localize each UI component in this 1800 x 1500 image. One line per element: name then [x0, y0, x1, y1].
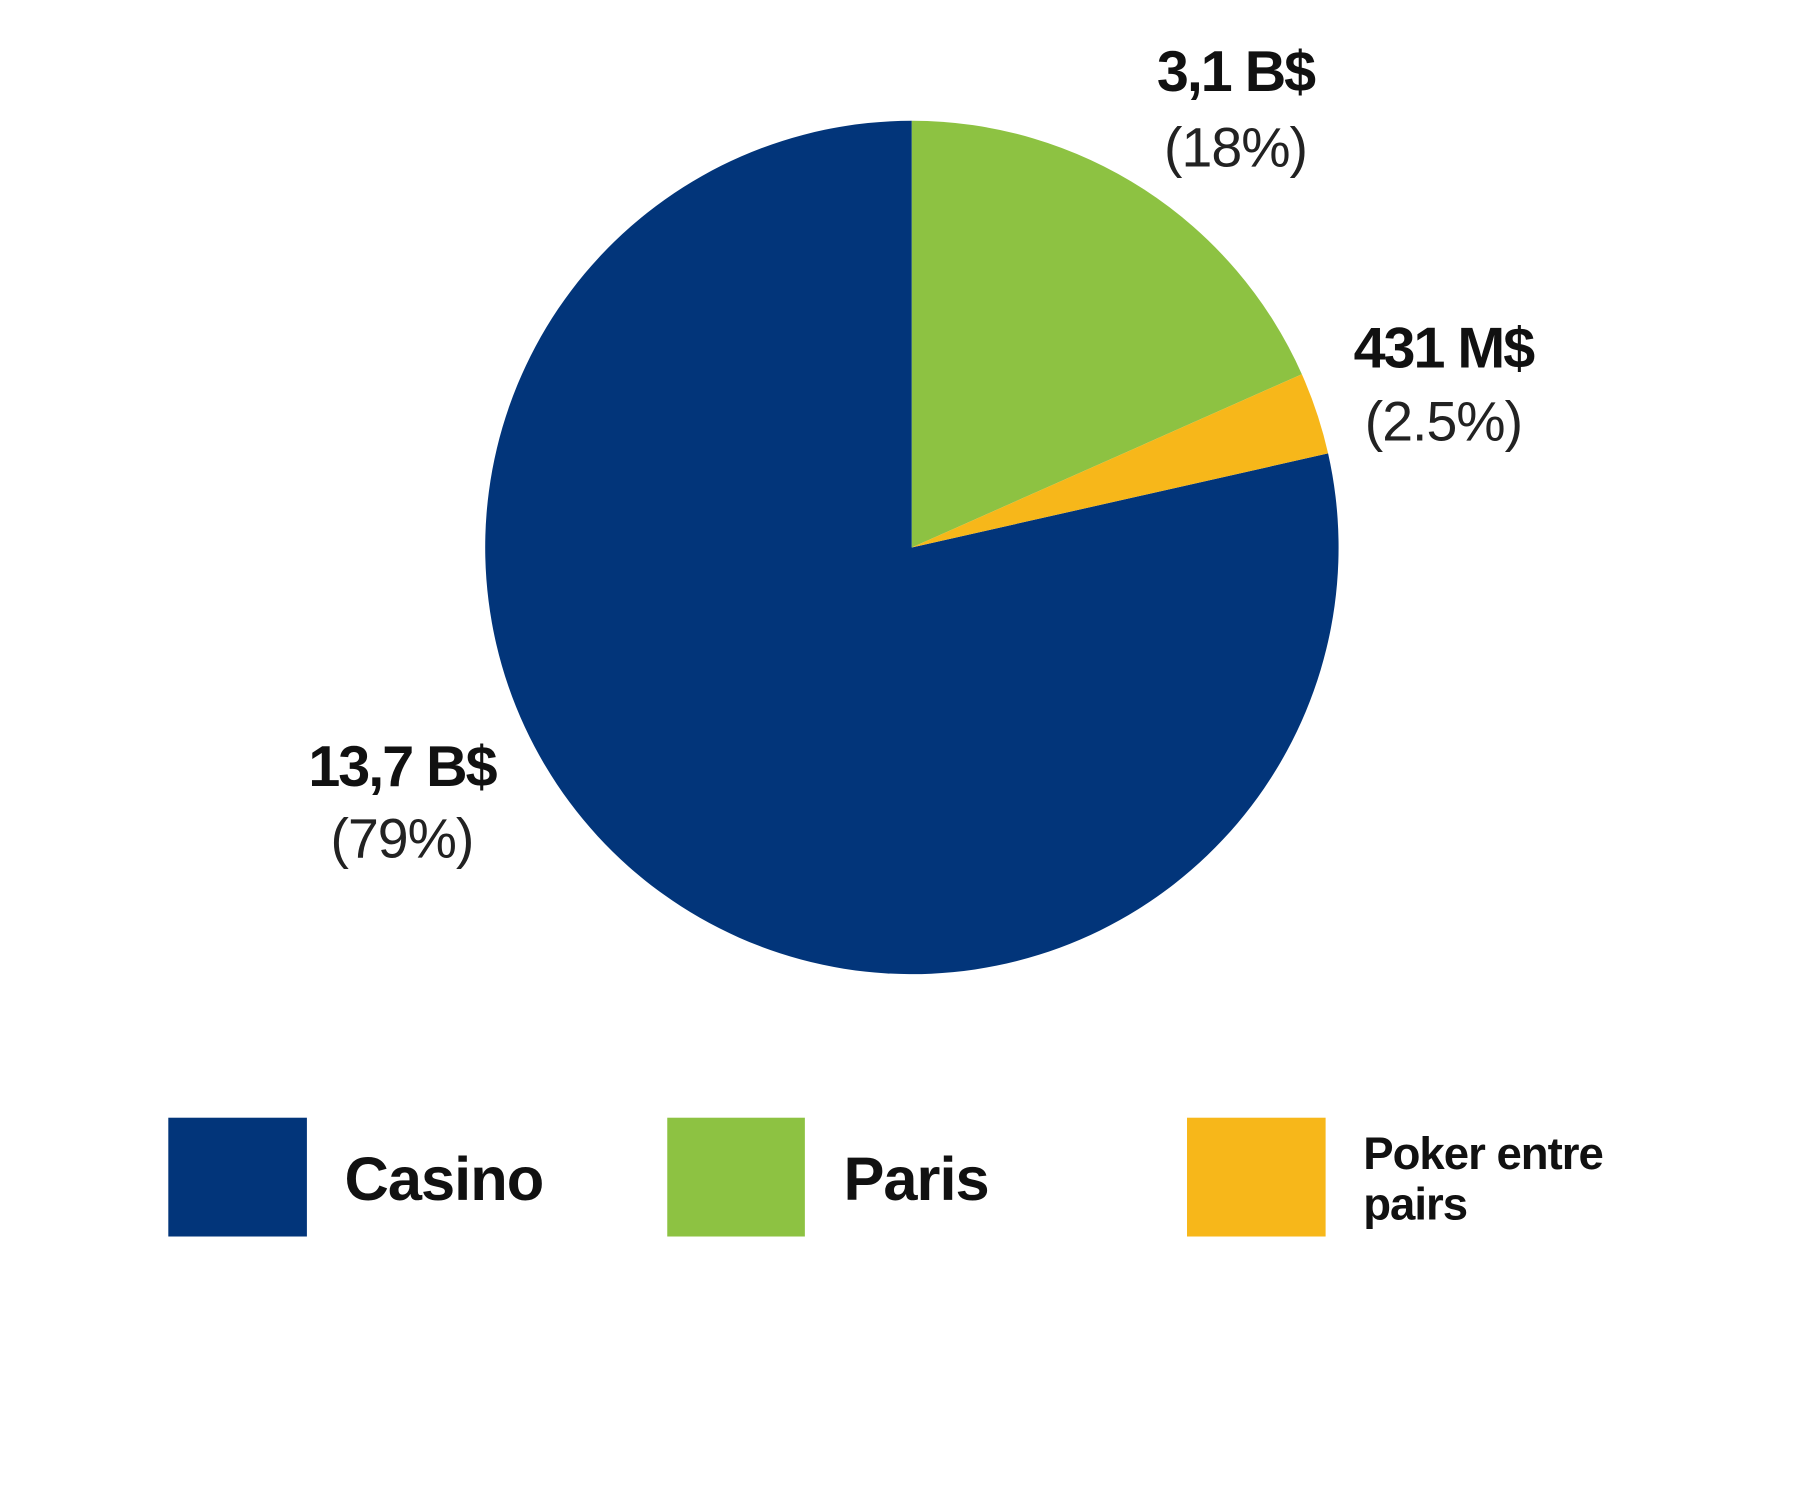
legend: paris: Paris: [843, 1145, 989, 1214]
legend: [168, 1118, 1603, 1237]
label: casino value: (79%): [330, 807, 473, 869]
legend: poker: [1187, 1118, 1603, 1237]
slice: casino: [485, 121, 1339, 974]
label: poker value: [1354, 316, 1535, 453]
label: casino value: 13,7 B$: [308, 735, 498, 799]
label: poker value: 431 M$: [1354, 316, 1535, 380]
slice: paris: [912, 121, 1302, 547]
label: casino value: [308, 735, 498, 869]
legend: paris: [667, 1118, 989, 1237]
legend: poker: pairs: [1363, 1179, 1467, 1230]
label: paris value: (18%): [1164, 116, 1307, 178]
slice: poker: [912, 374, 1328, 547]
legend: poker: Poker entre: [1363, 1128, 1603, 1179]
label: poker value: (2.5%): [1365, 391, 1522, 453]
legend: casino: [168, 1118, 543, 1237]
label: paris value: [1157, 40, 1316, 178]
label: paris value: 3,1 B$: [1157, 40, 1316, 104]
legend: casino: Casino: [345, 1145, 543, 1214]
